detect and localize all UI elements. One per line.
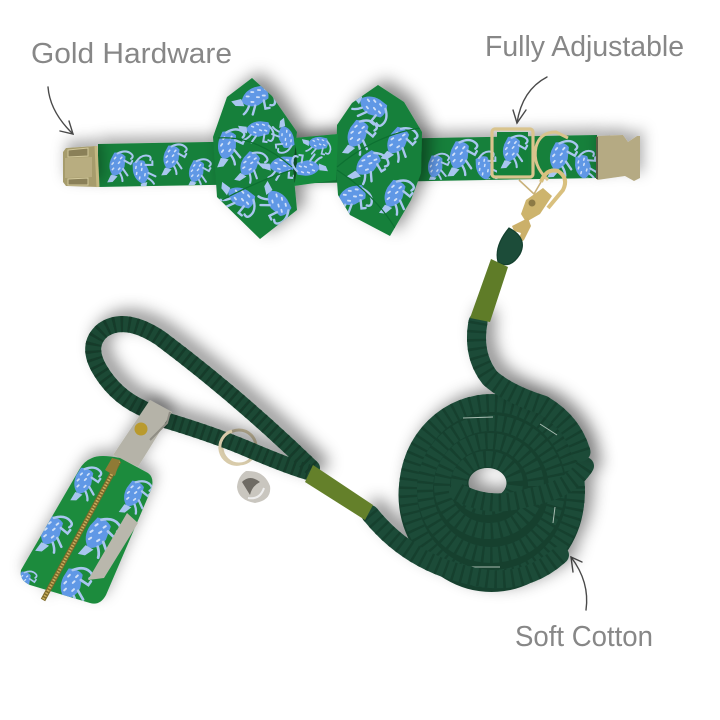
- arrow: to adjustable slider: [513, 77, 547, 123]
- sewn label: [88, 513, 138, 580]
- collar with bow tie: [63, 78, 640, 245]
- label: Fully Adjustable: Fully Adjustable: [485, 31, 684, 63]
- poop bag pouch: [12, 400, 172, 614]
- bow centre knot: [292, 134, 338, 186]
- label: Soft Cotton: Soft Cotton: [515, 621, 653, 653]
- rope: top knot: [497, 228, 522, 265]
- right buckle: [597, 135, 640, 181]
- zipper: [43, 458, 120, 600]
- olive cuff lower: [305, 465, 373, 520]
- metal ring front: [220, 431, 240, 464]
- D ring and snap hook: [512, 132, 568, 245]
- leather strap: [113, 400, 172, 467]
- olive cuff upper: [470, 259, 508, 322]
- collar band: [98, 135, 600, 193]
- arrow: to gold hardware: [48, 87, 73, 134]
- bow right wing: [327, 85, 422, 236]
- rope: collar end to coil: [476, 322, 581, 452]
- label: Gold Hardware: Gold Hardware: [31, 38, 232, 70]
- rope coil: [370, 398, 585, 592]
- arrow: to soft cotton rope: [571, 557, 587, 610]
- dog leash: [93, 228, 585, 592]
- metal ring back: [222, 430, 256, 464]
- product infographic: [16, 35, 683, 646]
- rope: handle loop: [93, 324, 312, 472]
- pouch body: [21, 456, 152, 604]
- left buckle: [63, 146, 98, 187]
- charm: [237, 471, 270, 503]
- slider buckle: [492, 129, 533, 177]
- bow left wing: [213, 78, 300, 239]
- bow tie: [213, 78, 422, 239]
